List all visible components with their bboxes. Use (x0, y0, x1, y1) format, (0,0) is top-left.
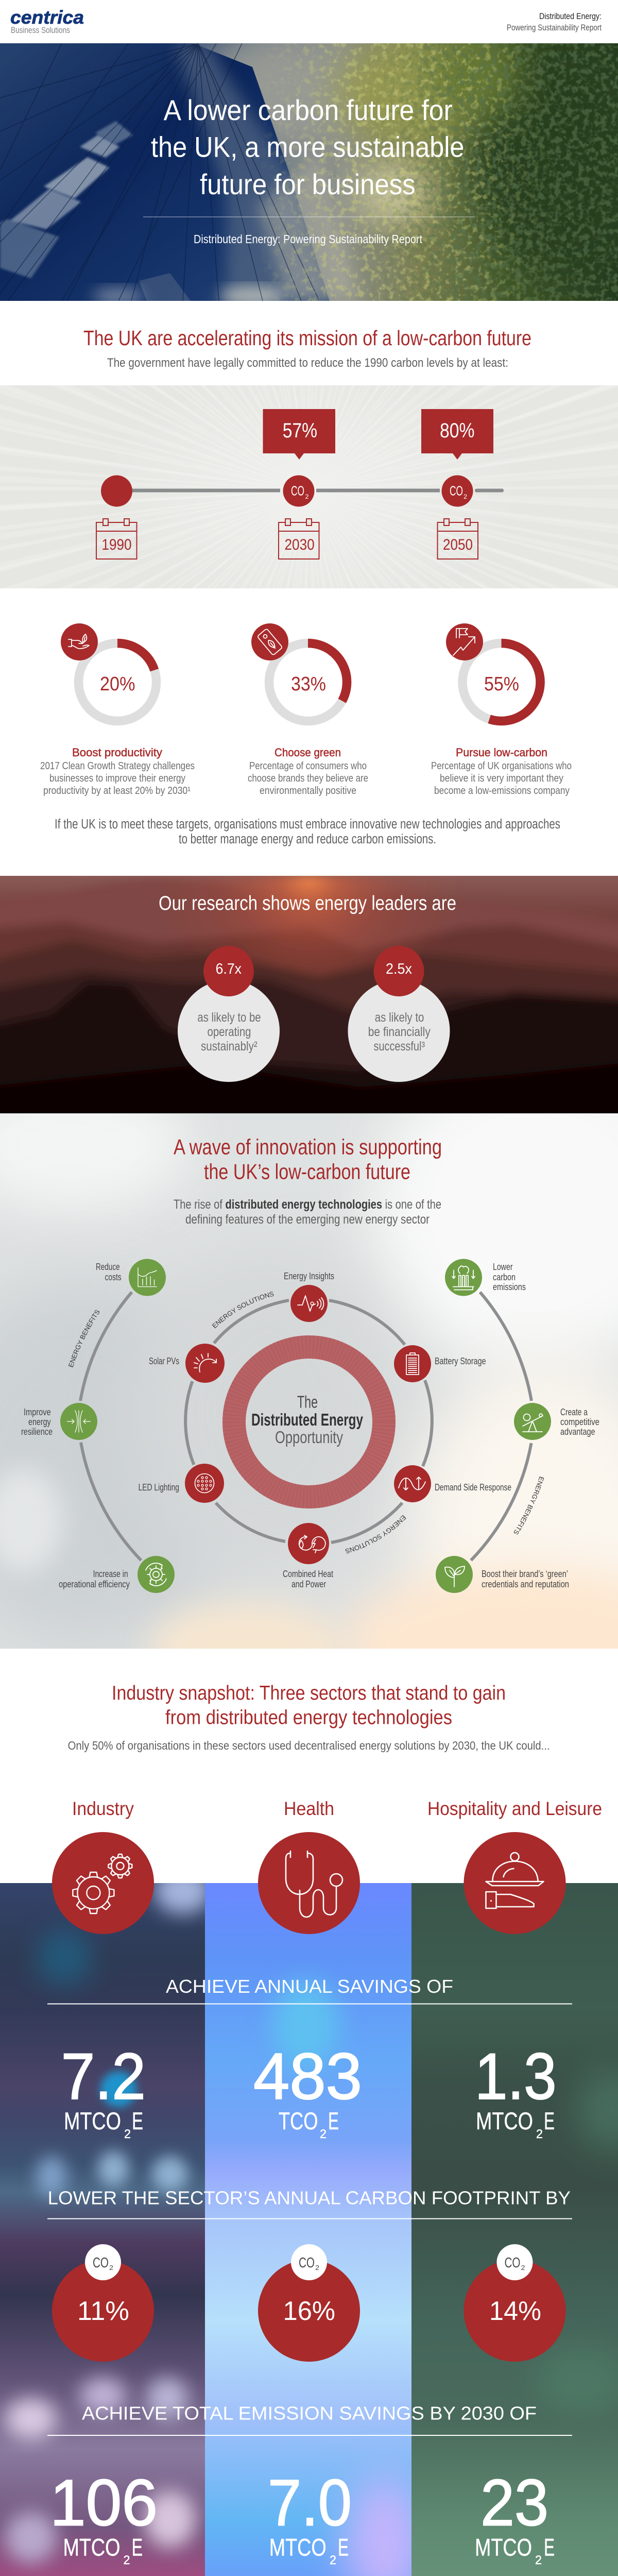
node: Create a competitive advantage (514, 1403, 599, 1440)
intro text: defining features of the emerging new energy sector (185, 1212, 430, 1227)
inner orbit: energy solutions: ENERGY SOLUTIONS (345, 1515, 406, 1553)
column background: industry (0, 1883, 205, 2576)
stat: industry annual saving: E (132, 2107, 143, 2134)
stat: pursue low-carbon (431, 623, 572, 796)
outer orbit: energy benefits: ENERGY BENEFITS (68, 1310, 100, 1367)
stat: industry annual saving (61, 2040, 146, 2141)
panel: energy leaders (0, 876, 618, 1113)
node: Battery Storage: Battery Storage (435, 1356, 486, 1366)
node: Combined Heat and Power: and Power (291, 1579, 326, 1589)
intro text (174, 1197, 441, 1227)
stat: hospitality annual saving: MTCO (476, 2107, 533, 2134)
header (0, 0, 618, 43)
milestone: 2030: 2 (305, 493, 309, 500)
milestone: 2050 (438, 475, 478, 559)
sunlight (358, 165, 430, 222)
stat: 11%: 11% (77, 2296, 129, 2326)
stat: 6.7x: operating (207, 1025, 251, 1039)
hero subtitle: Distributed Energy: Powering Sustainability Report (194, 232, 422, 246)
stat: 16%: CO (299, 2255, 315, 2270)
milestone: 1990 (96, 475, 137, 559)
stat: 23 (475, 2466, 555, 2567)
stat: hospitality annual saving (475, 2040, 557, 2141)
heading: The UK are accelerating its mission of a low-carbon future (83, 326, 531, 350)
stat: 106: MTCO (63, 2534, 121, 2561)
node: Improve energy resilience: resilience (21, 1427, 53, 1437)
stat: 16%: 16% (283, 2296, 335, 2326)
icon: gears (73, 1854, 132, 1913)
node: Reduce costs: Reduce (96, 1262, 120, 1272)
stat: pursue low-carbon: 55% (484, 673, 519, 695)
stat: choose green: choose brands they believe are (248, 772, 368, 784)
node: Improve energy resilience: energy (28, 1417, 51, 1427)
stat: 2.5x: as likely to (375, 1010, 424, 1025)
heading: from distributed energy technologies (165, 1706, 452, 1729)
heading (112, 1682, 506, 1729)
sector heading: Health (258, 1798, 360, 1934)
stat: 7.0: 7.0 (268, 2466, 352, 2539)
stat: 6.7x: 6.7x (216, 961, 242, 977)
icon: cloche (486, 1853, 544, 1908)
node: Create a competitive advantage: Create a (560, 1407, 588, 1417)
stat: 7.0: 2 (330, 2553, 336, 2567)
node: Energy Insights (284, 1271, 334, 1322)
stat: health annual saving: 483 (253, 2040, 362, 2113)
stat: 106: E (132, 2534, 143, 2561)
intro text: Only 50% of organisations in these sectors used decentralised energy solutions by 2030, the UK could... (68, 1739, 550, 1752)
milestone: 1990: 1990 (101, 536, 132, 553)
stat: boost productivity: Boost productivity (72, 746, 162, 759)
stat: choose green: environmentally positive (260, 785, 356, 796)
stat: 23: E (544, 2534, 555, 2561)
intro text: The rise of distributed energy technologies is one of the (174, 1197, 441, 1212)
callout: 57% (263, 409, 335, 460)
milestone: 2030: CO (291, 483, 304, 499)
stat: pursue low-carbon: Percentage of UK organisations who (431, 760, 572, 772)
callout: 80%: 80% (440, 419, 474, 442)
milestone: 2030: 2030 (284, 536, 315, 553)
panel: carbon target timeline (0, 385, 618, 588)
stat: 14%: 2 (521, 2264, 525, 2272)
sector heading: Hospitality and Leisure (427, 1798, 602, 1934)
stat: hospitality annual saving: 1.3 (475, 2040, 557, 2113)
stat: 16%: 2 (315, 2264, 319, 2272)
logo: Centrica Business Solutions: Business Solutions (11, 26, 70, 35)
column background: health (205, 1883, 411, 2576)
milestone: 2050: 2050 (443, 536, 473, 553)
node: Lower carbon emissions: emissions (493, 1282, 526, 1292)
stat: 106: 2 (124, 2553, 130, 2567)
node: Combined Heat and Power (283, 1523, 333, 1589)
building facade (0, 43, 360, 306)
outer orbit: energy benefits: ENERGY BENEFITS (514, 1477, 544, 1534)
stat: choose green (248, 623, 368, 796)
sector heading: Health: Health (284, 1798, 334, 1819)
donut 20% (78, 643, 157, 721)
section: annual savings: ACHIEVE ANNUAL SAVINGS OF (166, 1976, 453, 1997)
stat: 23: MTCO (475, 2534, 532, 2561)
node: Demand Side Response: Demand Side Response (435, 1482, 511, 1493)
node: LED Lighting: LED Lighting (139, 1482, 179, 1493)
stat: boost productivity: 20% (100, 673, 135, 695)
report name (507, 12, 602, 32)
node: Create a competitive advantage: advantage (560, 1427, 595, 1437)
donut 33% (269, 643, 347, 721)
icon: flag and rising arrow (446, 623, 483, 660)
callout: 57%: 57% (283, 419, 317, 442)
central ring: The Distributed Energy Opportunity: Distributed Energy (251, 1410, 363, 1429)
panel: industry snapshot (0, 1649, 618, 2576)
mountain silhouettes (0, 876, 618, 1133)
stat: pursue low-carbon: become a low-emissions company (434, 785, 570, 796)
section: total emission savings (47, 2403, 572, 2567)
panel: wave of innovation (0, 1113, 618, 1649)
stat: 6.7x: sustainably² (201, 1039, 258, 1054)
node: Boost brand credentials: credentials and reputation (482, 1579, 569, 1589)
section: total emission savings: ACHIEVE TOTAL EMISSION SAVINGS BY 2030 OF (82, 2403, 537, 2424)
node: Demand Side Response (394, 1465, 511, 1502)
node: LED Lighting (139, 1464, 224, 1503)
stat: 11% (52, 2244, 154, 2362)
tree foliage (258, 43, 618, 301)
stat: pursue low-carbon: believe it is very important they (440, 772, 564, 784)
outer orbit: energy benefits (68, 1291, 544, 1562)
node: Lower carbon emissions: Lower (493, 1262, 513, 1272)
column background: hospitality (411, 1883, 618, 2576)
logo: Centrica Business Solutions: centrica (10, 7, 84, 28)
conclusion text (55, 817, 560, 846)
node: Create a competitive advantage: competitive (560, 1417, 599, 1427)
stat: 11%: CO (93, 2255, 109, 2270)
stat: choose green: Choose green (274, 746, 341, 759)
stat: 23: 23 (480, 2466, 548, 2539)
stat: 2.5x: be financially (368, 1025, 431, 1039)
title: future for business (200, 168, 416, 200)
stat: 7.0: MTCO (269, 2534, 327, 2561)
stat: health annual saving: TCO (279, 2107, 318, 2134)
stat: boost productivity: 2017 Clean Growth Strategy challenges (40, 760, 195, 772)
stat: industry annual saving: 2 (124, 2127, 131, 2141)
stat: 14%: CO (505, 2255, 520, 2270)
central ring: The Distributed Energy Opportunity (234, 1347, 384, 1497)
timeline line (132, 488, 504, 493)
intro heading block (0, 301, 618, 385)
stat: pursue low-carbon: Pursue low-carbon (456, 746, 547, 759)
node: Boost brand credentials (436, 1556, 569, 1593)
panel: hero (0, 43, 618, 301)
sector heading: Industry (52, 1798, 154, 1934)
stat: boost productivity: productivity by at least 20% by 2030¹ (43, 785, 191, 796)
section: annual savings (47, 1976, 572, 2141)
title: A lower carbon future for (164, 94, 453, 126)
stat: 23: 2 (535, 2553, 542, 2567)
heading: Industry snapshot: Three sectors that stand to gain (112, 1682, 506, 1704)
node: Reduce costs: costs (105, 1272, 122, 1282)
stat: 16% (258, 2244, 360, 2362)
stat: hospitality annual saving: 2 (536, 2127, 543, 2141)
node: Lower carbon emissions (445, 1259, 526, 1296)
sub heading: The government have legally committed to reduce the 1990 carbon levels by at least: (107, 356, 508, 370)
stat: 6.7x (178, 946, 280, 1082)
heading: the UK’s low-carbon future (204, 1159, 410, 1184)
sector heading: Industry: Industry (72, 1798, 134, 1819)
node: Improve energy resilience (21, 1403, 97, 1440)
node: Reduce costs (96, 1259, 166, 1296)
node: Boost brand credentials: Boost their brand’s ‘green’ (482, 1569, 568, 1579)
stat: hospitality annual saving: E (544, 2107, 555, 2134)
node: Battery Storage (394, 1345, 486, 1382)
report name: Distributed Energy: (539, 12, 602, 21)
central ring: The Distributed Energy Opportunity: Opportunity (275, 1428, 343, 1447)
stat: health annual saving: 2 (320, 2127, 327, 2141)
node: Increase in operational efficiency (59, 1556, 175, 1593)
stat: 7.0 (268, 2466, 352, 2567)
stat: boost productivity: businesses to improve their energy (49, 772, 186, 784)
heading (174, 1134, 442, 1184)
section: carbon footprint: LOWER THE SECTOR’S ANNUAL CARBON FOOTPRINT BY (48, 2188, 571, 2208)
heading: Our research shows energy leaders are (159, 892, 456, 914)
stat: industry annual saving: 7.2 (61, 2040, 146, 2113)
callout: 80% (421, 409, 493, 460)
heading: A wave of innovation is supporting (174, 1134, 442, 1159)
section: carbon footprint (47, 2188, 572, 2362)
title: the UK, a more sustainable (151, 131, 465, 163)
stat: 2.5x: successful³ (374, 1039, 425, 1054)
icon: hand with leaf (61, 623, 98, 660)
stat: boost productivity (40, 623, 195, 796)
stat: 2.5x: 2.5x (386, 961, 412, 977)
sector heading: Hospitality and Leisure: Hospitality and Leisure (427, 1798, 602, 1819)
node: Solar PVs: Solar PVs (149, 1356, 179, 1366)
node: Increase in operational efficiency: operational efficiency (59, 1579, 130, 1589)
central ring: The Distributed Energy Opportunity: The (297, 1392, 318, 1412)
node: Combined Heat and Power: Combined Heat (283, 1569, 333, 1579)
node: Lower carbon emissions: carbon (493, 1272, 516, 1282)
inner orbit: energy solutions (184, 1292, 434, 1553)
stat: choose green: Percentage of consumers who (249, 760, 367, 772)
node: Energy Insights: Energy Insights (284, 1271, 334, 1281)
stat: health annual saving: E (328, 2107, 339, 2134)
stat: 7.0: E (338, 2534, 349, 2561)
milestone: 2050: CO (450, 483, 463, 499)
stat: 14%: 14% (489, 2296, 541, 2326)
stat: 11%: 2 (109, 2264, 113, 2272)
stat: choose green: 33% (291, 673, 326, 695)
panel: three targets (0, 588, 618, 876)
inner orbit: energy solutions: ENERGY SOLUTIONS (212, 1292, 274, 1328)
stat: 6.7x: as likely to be (197, 1010, 261, 1025)
milestone: 2050: 2 (464, 493, 467, 500)
stat: 2.5x (348, 946, 450, 1082)
donut 55% (462, 643, 540, 721)
stat: 14% (464, 2244, 565, 2362)
title (151, 94, 465, 200)
stat: 106: 106 (50, 2466, 158, 2539)
conclusion text: to better manage energy and reduce carbon emissions. (179, 832, 436, 846)
node: Solar PVs (149, 1344, 225, 1383)
node: Increase in operational efficiency: Increase in (93, 1569, 128, 1579)
icon: stethoscope (286, 1851, 342, 1917)
node: Improve energy resilience: Improve (24, 1407, 51, 1417)
icon: eco tag (251, 623, 288, 660)
milestone: 2030 (279, 475, 319, 559)
stat: industry annual saving: MTCO (64, 2107, 121, 2134)
